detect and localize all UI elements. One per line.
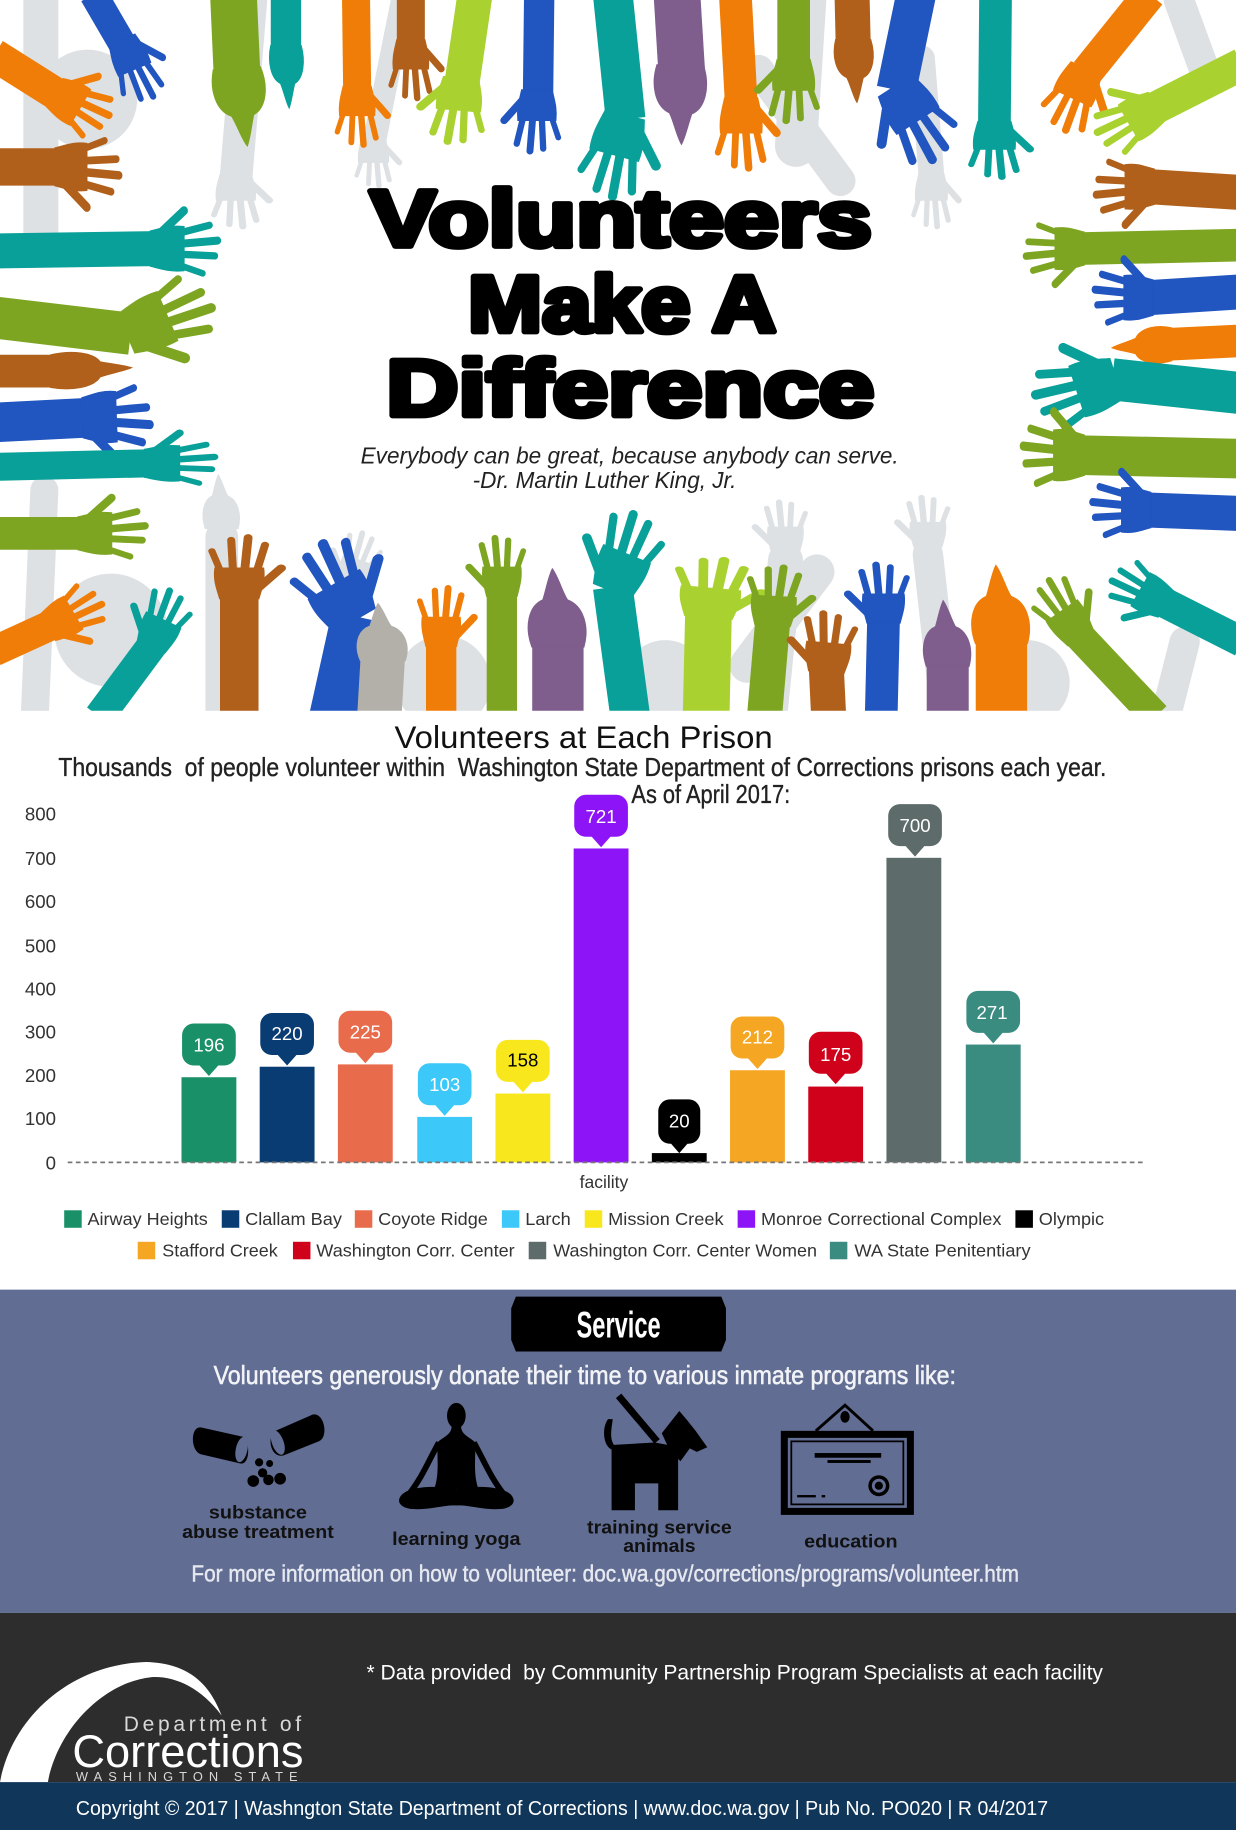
logo: Corrections xyxy=(72,1726,303,1777)
title xyxy=(370,174,874,432)
y axis labels: 400 xyxy=(25,979,56,1000)
left hands xyxy=(0,55,225,656)
label: training service animals xyxy=(587,1517,732,1556)
panel: service xyxy=(0,1290,1236,1613)
y axis labels: 500 xyxy=(25,935,56,956)
y axis labels xyxy=(25,803,56,1173)
y axis labels: 100 xyxy=(25,1108,56,1129)
title: Difference xyxy=(386,343,874,432)
chart legend: Larch xyxy=(525,1209,571,1229)
chart legend: Clallam Bay xyxy=(245,1209,342,1229)
logo: WASHINGTON STATE xyxy=(76,1769,298,1784)
bars with value callouts: 225 xyxy=(350,1022,381,1043)
bars with value callouts: 20 xyxy=(669,1110,690,1131)
chart legend: Monroe Correctional Complex xyxy=(761,1209,1002,1229)
label: substance abuse treatment xyxy=(182,1501,334,1542)
chart subtitle xyxy=(58,754,1106,809)
service intro text: Volunteers generously donate their time to various inmate programs like: xyxy=(214,1362,956,1390)
bars with value callouts: 212 xyxy=(742,1026,773,1047)
bars with value callouts: 700 xyxy=(899,815,931,836)
quote xyxy=(361,442,899,493)
footer bar: Copyright © 2017 | Washngton State Department of Corrections | www.doc.wa.gov | Pub No. PO020 | R 04/2017 xyxy=(76,1798,1048,1820)
bars with value callouts: 721 xyxy=(586,806,617,827)
title: Make A xyxy=(468,259,776,348)
y axis labels: 600 xyxy=(25,891,56,912)
service badge xyxy=(511,1297,726,1351)
y axis labels: 700 xyxy=(25,848,56,869)
bottom hands xyxy=(99,502,1236,717)
bars with value callouts: 158 xyxy=(507,1050,538,1071)
data note: * Data provided by Community Partnership Program Specialists at each facility xyxy=(366,1661,1103,1684)
icon: yoga figure xyxy=(399,1403,514,1509)
logo xyxy=(0,1662,303,1784)
label: learning yoga: learning yoga xyxy=(392,1528,521,1549)
quote: -Dr. Martin Luther King, Jr. xyxy=(473,467,736,493)
chart legend xyxy=(64,1209,1104,1260)
bars with value callouts xyxy=(181,795,1021,1162)
y axis labels: 800 xyxy=(25,803,56,824)
chart legend: WA State Penitentiary xyxy=(854,1240,1031,1260)
label: education: education xyxy=(804,1531,898,1552)
icon: framed certificate xyxy=(781,1405,914,1515)
logo: Department of xyxy=(124,1713,301,1736)
chart heading: Volunteers at Each Prison xyxy=(394,719,773,755)
y axis labels: 300 xyxy=(25,1022,56,1043)
icon: pills xyxy=(193,1414,324,1487)
y axis labels: 200 xyxy=(25,1065,56,1086)
right hands xyxy=(1023,162,1236,535)
background grey hands xyxy=(35,0,1204,729)
chart legend: Washington Corr. Center Women xyxy=(553,1240,817,1260)
chart legend: Coyote Ridge xyxy=(378,1209,488,1229)
title: Volunteers xyxy=(370,174,872,263)
bars with value callouts: 175 xyxy=(820,1044,851,1065)
chart subtitle: As of April 2017: xyxy=(631,781,790,809)
panel cover below hero xyxy=(0,711,1236,1290)
bars with value callouts: 271 xyxy=(976,1002,1008,1023)
panel: data note and logo xyxy=(0,1613,1236,1784)
volunteer link text: For more information on how to volunteer: doc.wa.gov/corrections/programs/volunteer.htm xyxy=(191,1560,1019,1586)
panel: hero with hands xyxy=(0,0,1236,729)
label: training service animals: animals xyxy=(623,1535,696,1556)
y axis labels: 0 xyxy=(46,1152,56,1173)
label: substance abuse treatment: substance xyxy=(209,1501,307,1522)
label: training service animals: training service xyxy=(587,1517,732,1538)
chart legend: Airway Heights xyxy=(88,1209,208,1229)
x axis label: facility xyxy=(580,1172,629,1192)
chart legend: Mission Creek xyxy=(608,1209,724,1229)
label: substance abuse treatment: abuse treatment xyxy=(182,1521,334,1542)
top hands xyxy=(93,0,1236,205)
chart legend: Washington Corr. Center xyxy=(316,1240,515,1260)
bars with value callouts: 220 xyxy=(272,1023,303,1044)
bar chart xyxy=(25,795,1144,1192)
quote: Everybody can be great, because anybody can serve. xyxy=(361,442,899,468)
chart legend: Olympic xyxy=(1039,1209,1104,1229)
icon: service dog xyxy=(604,1396,707,1510)
footer bar xyxy=(0,1782,1236,1830)
bars with value callouts: 196 xyxy=(193,1035,224,1056)
bars with value callouts: 103 xyxy=(429,1074,460,1095)
chart subtitle: Thousands of people volunteer within Washington State Department of Corrections prisons each year. xyxy=(58,754,1106,782)
chart legend: Stafford Creek xyxy=(162,1240,278,1260)
service badge: Service xyxy=(577,1303,661,1345)
